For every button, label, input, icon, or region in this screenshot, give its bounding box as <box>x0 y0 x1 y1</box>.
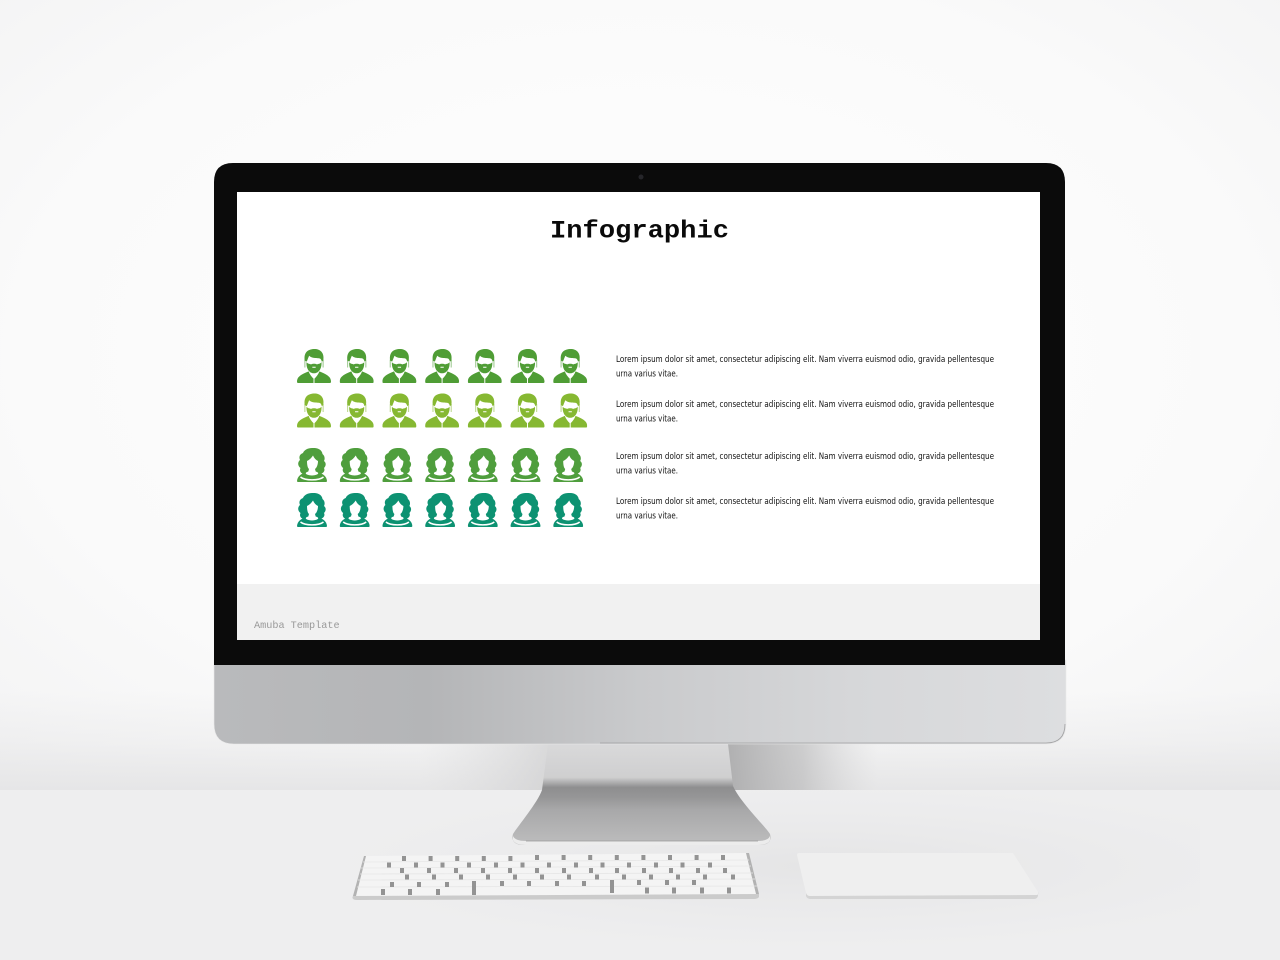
camera <box>638 174 644 180</box>
footer label: Amuba Template <box>254 620 340 632</box>
icon row: men, light green <box>297 394 587 428</box>
keyboard key gaps <box>381 855 735 895</box>
text block 3 <box>616 451 994 476</box>
text block 2 <box>616 399 994 424</box>
icon row: men, dark green <box>297 349 587 383</box>
footer band <box>237 584 1040 640</box>
text block 4: Lorem ipsum dolor sit amet, consectetur adipiscing elit. Nam viverra euismod odio, gravida pellentesque <box>616 496 994 506</box>
title: Infographic <box>550 216 729 246</box>
trackpad <box>797 853 1038 899</box>
screen <box>237 192 1040 640</box>
text block 1: Lorem ipsum dolor sit amet, consectetur adipiscing elit. Nam viverra euismod odio, gravida pellentesque <box>616 354 994 364</box>
text block 1 <box>616 354 994 378</box>
monitor chin <box>214 660 1066 744</box>
monitor bezel <box>214 163 1065 665</box>
keyboard <box>352 853 759 900</box>
text block 4: urna varius vitae. <box>616 510 678 520</box>
monitor stand <box>512 744 771 845</box>
text block 1: urna varius vitae. <box>616 368 678 378</box>
icon row: women, teal <box>297 493 583 527</box>
monitor <box>214 163 1066 744</box>
text block 2: urna varius vitae. <box>616 414 678 424</box>
text block 3: urna varius vitae. <box>616 466 678 476</box>
desk surface <box>0 790 1280 960</box>
text block 4 <box>616 496 994 520</box>
text block 2: Lorem ipsum dolor sit amet, consectetur adipiscing elit. Nam viverra euismod odio, gravida pellentesque <box>616 399 994 409</box>
icon row: women, green <box>297 448 583 482</box>
keyboard row lines <box>357 860 757 887</box>
text block 3: Lorem ipsum dolor sit amet, consectetur adipiscing elit. Nam viverra euismod odio, gravida pellentesque <box>616 451 994 461</box>
